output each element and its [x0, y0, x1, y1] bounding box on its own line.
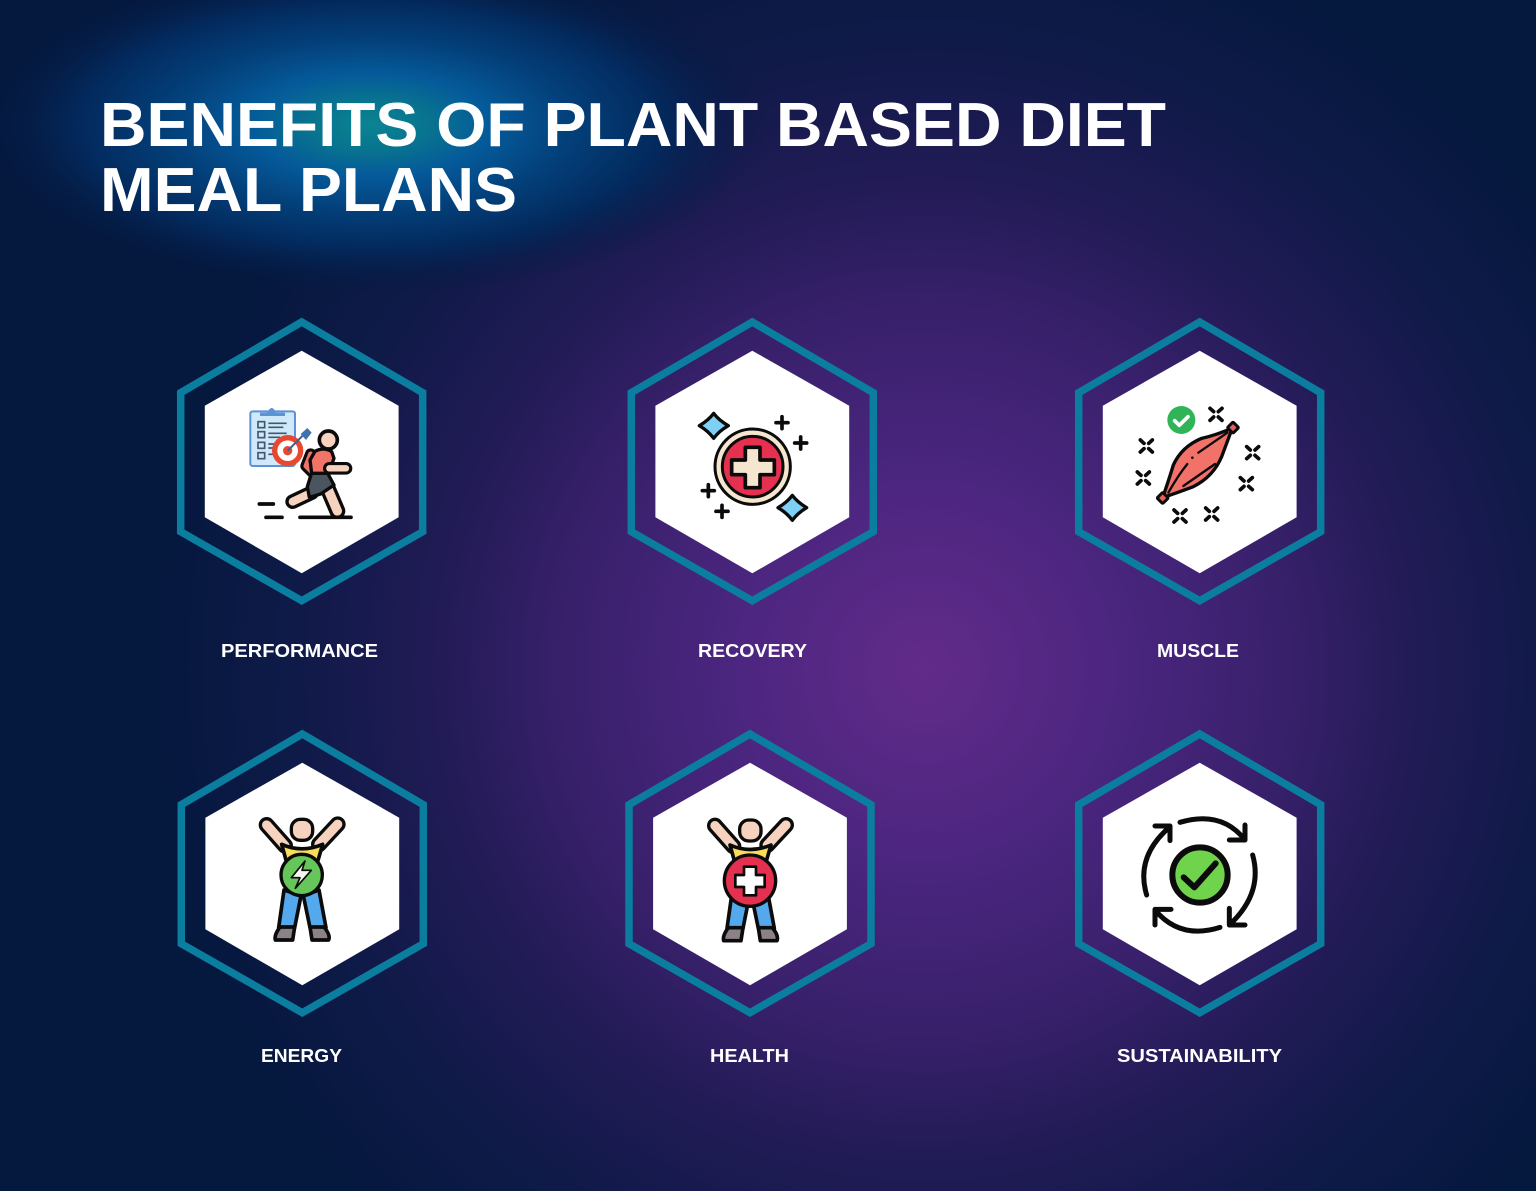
label: RECOVERY [698, 641, 807, 661]
label: MUSCLE [1157, 641, 1239, 661]
hexagon frame [181, 322, 423, 601]
icon: runner with clipboard and target [250, 408, 351, 517]
title [100, 91, 1166, 225]
icon: circular arrows with check [1144, 819, 1255, 931]
icon: medical cross with sparkles [699, 413, 807, 520]
hexagon frame [631, 322, 873, 601]
hexagon frame [629, 734, 871, 1013]
panel: health [629, 734, 871, 1066]
icon: person with medical cross [715, 820, 786, 941]
panel: recovery [631, 322, 873, 661]
panel: muscle [1079, 322, 1321, 661]
hexagon frame [181, 734, 423, 1013]
icon: person with energy bolt [267, 819, 338, 940]
hexagon frame [1079, 322, 1321, 601]
label: HEALTH [710, 1046, 789, 1066]
icon: muscle with check badge [1137, 406, 1259, 522]
title: MEAL PLANS [100, 156, 517, 225]
title: BENEFITS OF PLANT BASED DIET [100, 91, 1166, 160]
hexagon frame [1079, 734, 1321, 1013]
label: PERFORMANCE [221, 641, 378, 661]
panel: performance [181, 322, 423, 661]
label: SUSTAINABILITY [1117, 1046, 1282, 1066]
panel: sustainability [1079, 734, 1321, 1066]
panel: energy [181, 734, 423, 1066]
label: ENERGY [261, 1046, 342, 1066]
